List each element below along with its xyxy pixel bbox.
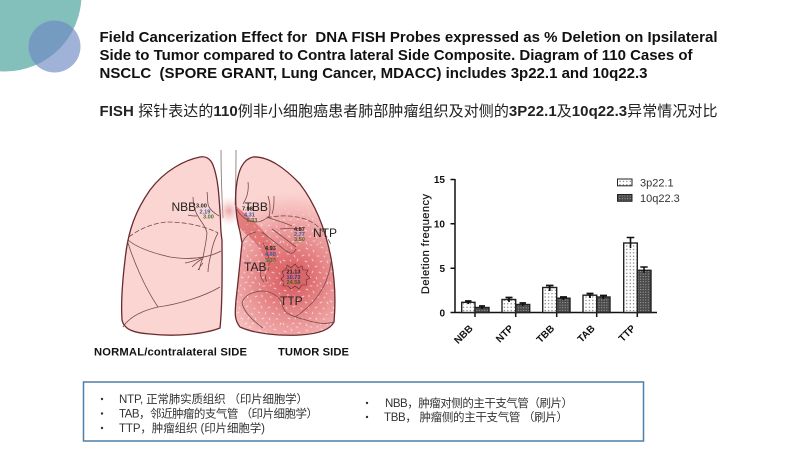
- lung diagram: [94, 150, 350, 358]
- title: English: [100, 29, 718, 82]
- label: TBB: TBB: [244, 200, 268, 214]
- legend: 3p22.1: [640, 178, 674, 190]
- caption: normal side: NORMAL/contralateral SIDE: [94, 346, 248, 358]
- trachea lines: [216, 150, 242, 226]
- values: NBB: [196, 204, 214, 220]
- label: NBB: NBB: [172, 200, 196, 214]
- y axis: 5: [439, 264, 445, 275]
- y axis: [434, 175, 657, 320]
- legend box: [84, 382, 644, 441]
- bars: TAB: [583, 293, 610, 312]
- values: NBB: 2.19: [200, 210, 210, 216]
- right notes: TBB， 肿瘤侧的主干支气管 （刷片）: [384, 410, 568, 424]
- x labels: TBB: [535, 323, 557, 346]
- title: English: NSCLC (SPORE GRANT, Lung Cancer, MDACC) includes 3p22.1 and 10q22.3: [100, 65, 648, 82]
- caption: tumor side: TUMOR SIDE: [278, 346, 350, 358]
- legend: 10q22.3: [640, 193, 680, 205]
- normal lung: [122, 157, 222, 335]
- right notes: NBB，肿瘤对侧的主干支气管（刷片）: [385, 396, 573, 410]
- y axis title: Deletion frequency: [420, 194, 432, 294]
- values: TBB: 4.31: [244, 212, 255, 218]
- values: NBB: 3.00: [196, 204, 207, 210]
- values: TTP: [286, 270, 300, 286]
- x labels: TAB: [576, 323, 598, 345]
- values: TTP: 10.73: [286, 275, 300, 281]
- values: TTP: 21.13: [286, 270, 300, 276]
- values: NBB: 3.00: [203, 214, 214, 220]
- x labels: [453, 323, 638, 346]
- decorative circle: teal: [0, 0, 82, 72]
- values: TAB: 4.93: [265, 246, 276, 252]
- bar chart: [420, 175, 680, 346]
- left notes: TAB，邻近肿瘤的支气管 （印片细胞学）: [119, 406, 318, 420]
- y axis: 0: [439, 308, 445, 320]
- title: Chinese: FISH 探针表达的110例非小细胞癌患者肺部肿瘤组织及对侧的3P22.1及10q22.3异常情况对比: [100, 103, 718, 120]
- right notes: [366, 396, 573, 424]
- decorative circle: blue: [28, 20, 80, 72]
- bars: NTP: [502, 297, 530, 312]
- title: English: Field Cancerization Effect for DNA FISH Probes expressed as % Deletion on Ipsilateral: [100, 29, 718, 46]
- values: NTP: 4.87: [294, 227, 305, 233]
- tumor outline: [281, 264, 310, 289]
- label: TTP: TTP: [280, 294, 303, 308]
- left notes: NTP, 正常肺实质组织 （印片细胞学）: [119, 392, 308, 406]
- values: TBB: 7.98: [242, 206, 253, 212]
- values: TAB: 5.33: [265, 258, 276, 264]
- x labels: NTP: [494, 323, 516, 345]
- x labels: NBB: [453, 323, 476, 346]
- y axis: 15: [434, 175, 445, 186]
- title: English: Side to Tumor compared to Contra lateral Side Composite. Diagram of 110 Cases of: [100, 47, 694, 64]
- label: TAB: TAB: [244, 260, 266, 274]
- left notes: [101, 392, 318, 435]
- label: NTP: NTP: [313, 226, 337, 240]
- bars: NBB: [462, 300, 489, 312]
- values: TAB: 4.60: [265, 252, 276, 258]
- values: NTP: 2.77: [294, 232, 305, 238]
- values: TBB: [242, 206, 257, 224]
- x labels: TTP: [617, 323, 638, 344]
- values: NTP: [294, 227, 305, 243]
- values: TAB: [265, 246, 276, 264]
- tumor-side lung: [234, 156, 336, 336]
- legend: [618, 178, 680, 205]
- values: TTP: 24.58: [286, 280, 300, 286]
- bars: TTP: [624, 238, 651, 312]
- bars: TBB: [543, 285, 570, 312]
- values: TBB: 6.33: [246, 218, 257, 224]
- values: NTP: 3.50: [294, 237, 305, 243]
- left notes: TTP，肿瘤组织 (印片细胞学): [119, 421, 265, 435]
- y axis: 10: [434, 220, 445, 230]
